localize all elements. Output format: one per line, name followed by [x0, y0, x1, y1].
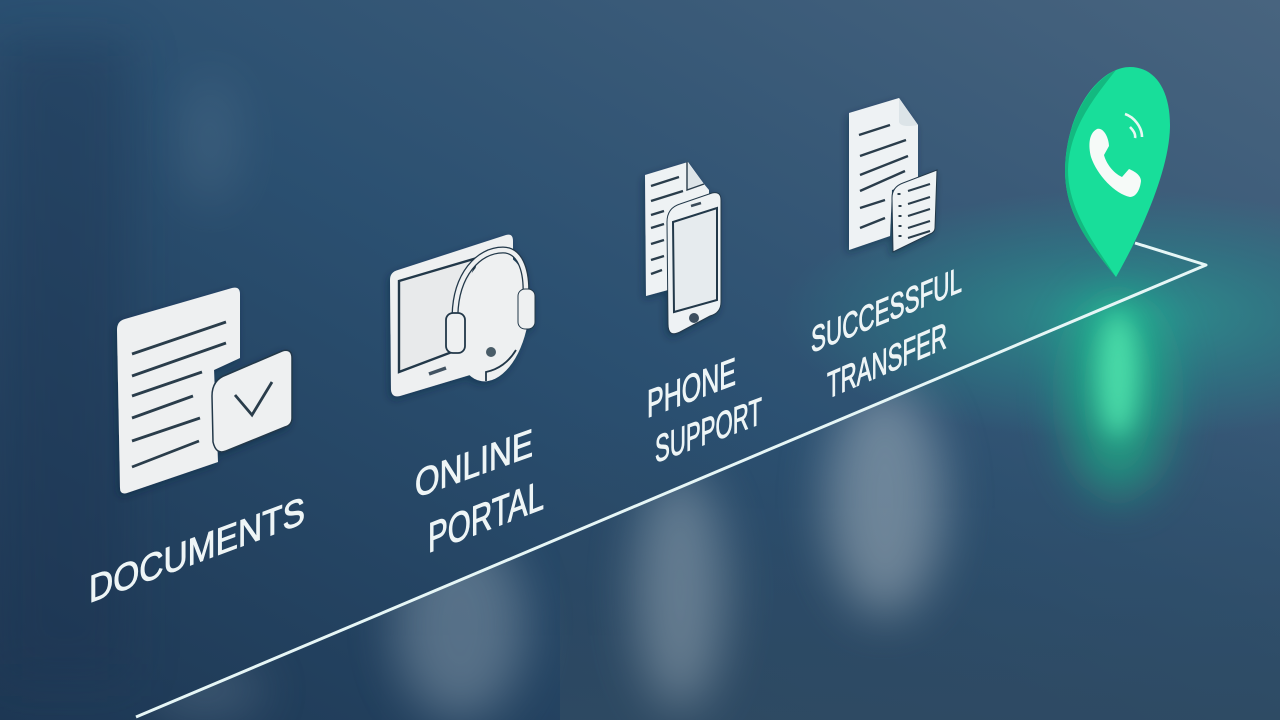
label: online portal: PORTAL — [428, 472, 544, 563]
label: successful transfer: SUCCESSFUL — [811, 258, 962, 361]
label: successful transfer: TRANSFER — [827, 315, 947, 408]
label: successful transfer — [811, 258, 962, 408]
icon: checkbox — [212, 350, 292, 452]
green pin reflection — [1068, 295, 1168, 495]
phone — [667, 193, 721, 334]
label: phone support: SUPPORT — [655, 390, 762, 472]
agent head with headset — [445, 249, 539, 387]
small checklist document — [892, 170, 937, 252]
label: online portal — [415, 421, 544, 563]
floor reflections — [145, 385, 943, 720]
icon: documents — [117, 288, 292, 493]
label: online portal: ONLINE — [415, 421, 533, 507]
label: phone support: PHONE — [647, 348, 736, 427]
icon: online portal — [390, 235, 539, 396]
phone handset glyph — [1089, 129, 1141, 197]
icon: green location pin with phone — [1065, 67, 1170, 277]
label: documents: DOCUMENTS — [89, 489, 305, 612]
icon: phone support — [645, 162, 721, 334]
label: phone support — [647, 348, 762, 472]
path line — [136, 243, 1206, 717]
icon: successful transfer — [849, 98, 937, 252]
faint upper reflection — [182, 75, 238, 205]
